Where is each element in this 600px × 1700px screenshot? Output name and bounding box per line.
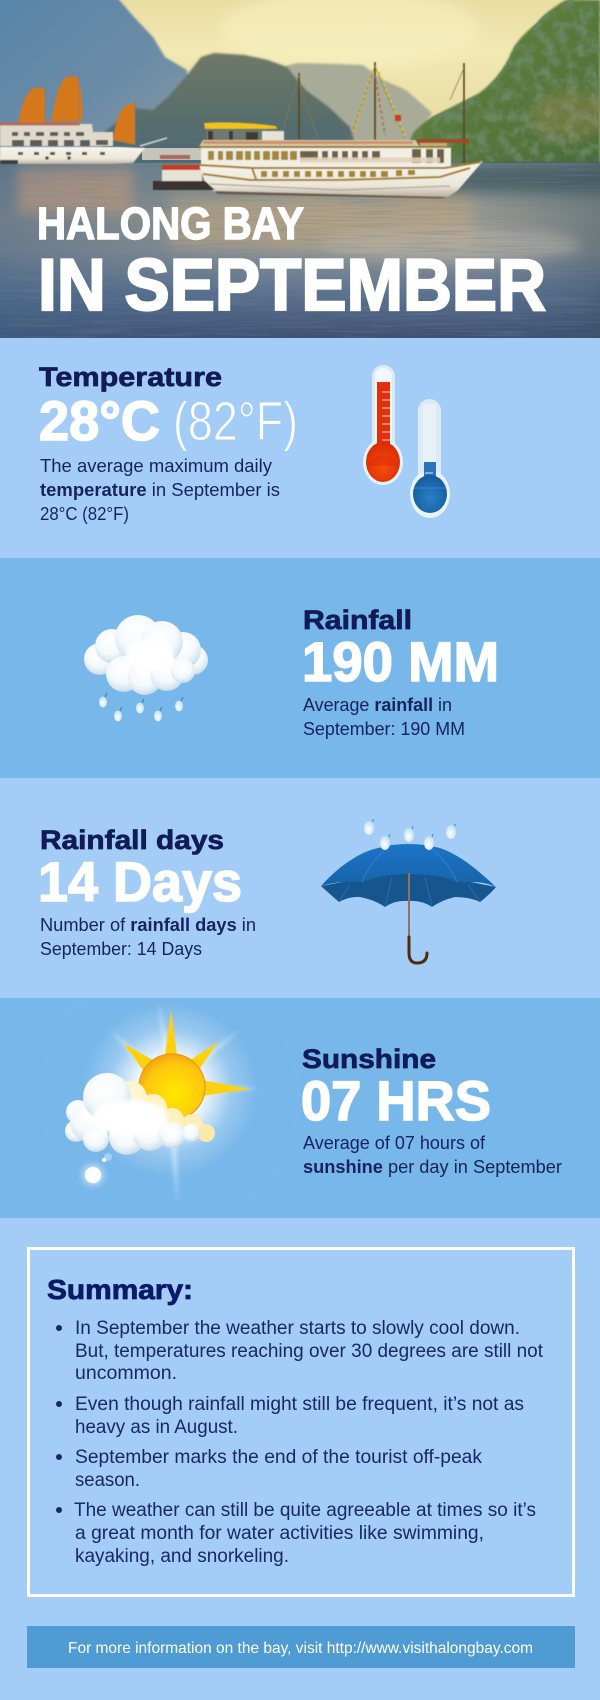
heading: temperature: Temperature: [39, 362, 222, 392]
panel: rainfall: [0, 558, 600, 778]
panel: sunshine: [0, 998, 600, 1218]
icon: sun behind cloud: [65, 1004, 257, 1198]
value: 28°C (82°F): [39, 389, 298, 452]
temperature description: temperature in September is: [40, 480, 277, 500]
header photo: Halong Bay boats: [0, 0, 600, 340]
summary bullet 2: Even though rainfall might still be frequent, it’s not as: [75, 1394, 524, 1415]
footer link bar: [27, 1626, 575, 1668]
summary bullet 3: [56, 1447, 482, 1491]
sunshine description: Average of 07 hours of: [303, 1133, 486, 1153]
rainfall description: September: 190 MM: [303, 719, 465, 739]
summary bullet 3: season.: [75, 1470, 140, 1491]
summary bullet 2: heavy as in August.: [75, 1417, 238, 1438]
rainfall days description: September: 14 Days: [40, 939, 202, 959]
value: 28°C (82°F): (82°F): [173, 390, 298, 452]
panel: summary: [28, 1248, 574, 1596]
summary bullet 1: [56, 1318, 544, 1384]
temperature description: The average maximum daily: [40, 456, 272, 476]
panel: rainfall days: [0, 778, 600, 998]
panel: temperature: [0, 338, 600, 558]
value: 28°C (82°F): 28°C: [39, 389, 160, 452]
summary bullet 1: In September the weather starts to slowly cool down.: [75, 1318, 520, 1339]
summary bullet 4: a great month for water activities like swimming,: [75, 1523, 484, 1544]
value: 190 MM: 190 MM: [302, 630, 499, 693]
title: [37, 198, 546, 326]
umbrella rain drops: [364, 819, 456, 850]
footer link bar: For more information on the bay, visit http://www.visithalongbay.com: [68, 1640, 533, 1657]
icon: rain cloud: [84, 615, 208, 722]
heading: sunshine: Sunshine: [302, 1044, 436, 1074]
summary bullet 3: September marks the end of the tourist off-peak: [75, 1447, 482, 1468]
temperature description: 28°C (82°F): [40, 504, 129, 524]
icon: umbrella with drops: [321, 819, 496, 963]
heading: rainfall: Rainfall: [303, 605, 412, 635]
rainfall days description: Number of rainfall days in: [40, 915, 256, 935]
summary bullet 2: [56, 1394, 524, 1438]
rainfall description: Average rainfall in: [303, 695, 452, 715]
heading: rainfall days: Rainfall days: [40, 825, 224, 855]
summary bullet 1: uncommon.: [75, 1363, 177, 1384]
left cruise boat with orange sails: [0, 74, 190, 164]
main wooden cruise boat: [153, 62, 483, 198]
heading: summary: Summary:: [47, 1274, 193, 1305]
summary bullet 4: [56, 1500, 536, 1567]
value: 14 Days: 14 Days: [38, 850, 242, 913]
summary bullet 4: kayaking, and snorkeling.: [75, 1546, 289, 1567]
title: IN SEPTEMBER: [38, 245, 546, 326]
value: 07 HRS: 07 HRS: [301, 1069, 491, 1132]
sunshine description: sunshine per day in September: [303, 1157, 560, 1177]
summary bullet 1: But, temperatures reaching over 30 degrees are still not: [75, 1341, 544, 1362]
icon: thermometers: [363, 365, 450, 518]
rain drops: [99, 693, 183, 722]
title: HALONG BAY: [37, 198, 304, 249]
summary bullet 4: The weather can still be quite agreeable at times so it’s: [74, 1500, 536, 1521]
